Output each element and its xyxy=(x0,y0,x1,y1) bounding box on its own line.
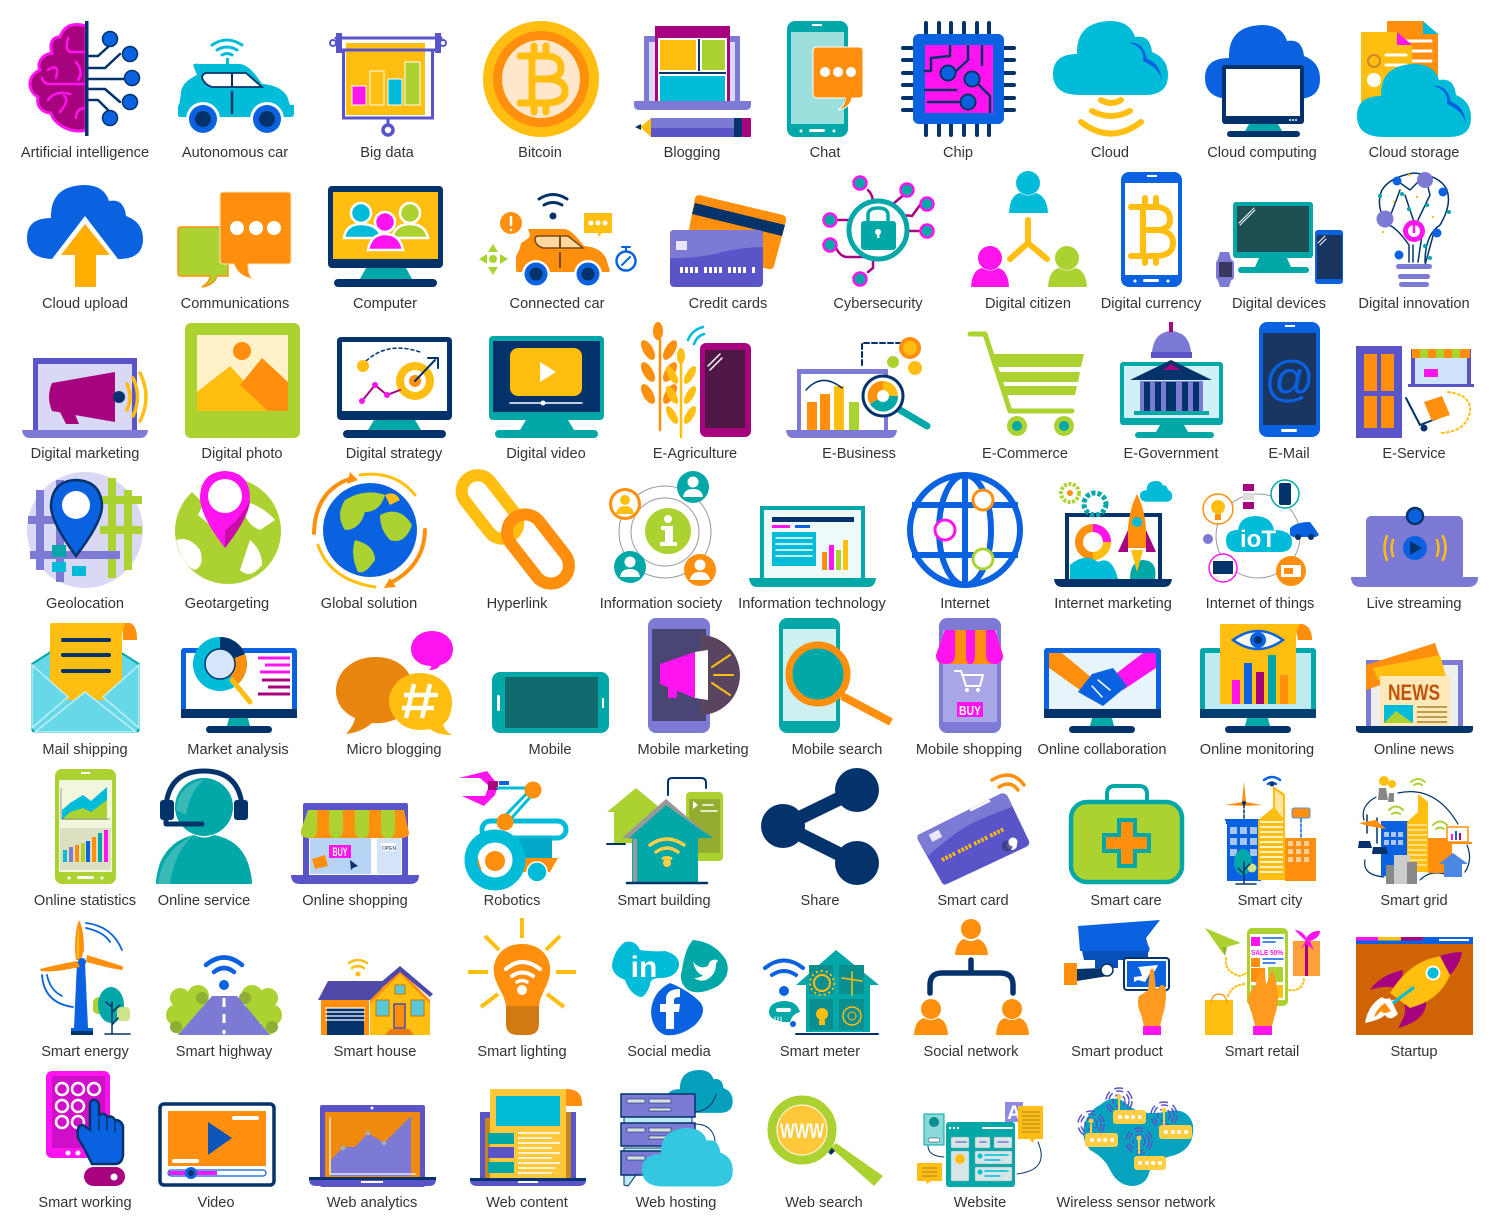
icon: hyperlink xyxy=(455,469,576,591)
icon: e-mail xyxy=(1259,322,1320,437)
icon: bitcoin xyxy=(483,21,599,137)
label: smart product: Smart product xyxy=(1071,1044,1163,1060)
label: chip: Chip xyxy=(943,145,973,161)
icon: share xyxy=(761,768,879,885)
icon: website: A xyxy=(1007,1103,1021,1124)
icon: cloud upload xyxy=(27,185,143,287)
label: smart building: Smart building xyxy=(617,893,711,909)
icon: online collaboration xyxy=(1044,648,1161,733)
icon: e-mail: @ xyxy=(1264,351,1315,407)
icon: digital photo xyxy=(185,323,300,438)
label: micro blogging: Micro blogging xyxy=(347,742,441,758)
icon: online shopping: BUY xyxy=(332,845,348,859)
icon: mail shipping xyxy=(32,623,139,732)
label: smart grid: Smart grid xyxy=(1380,893,1448,909)
label: internet: Internet xyxy=(940,596,990,612)
label: e-commerce: E-Commerce xyxy=(982,446,1068,462)
icon: digital video xyxy=(489,336,604,438)
icon: mobile search xyxy=(779,618,891,733)
label: digital video: Digital video xyxy=(506,446,586,462)
icon: cloud storage xyxy=(1357,21,1471,137)
label: online monitoring: Online monitoring xyxy=(1200,742,1314,758)
label: communications: Communications xyxy=(181,296,289,312)
label: live streaming: Live streaming xyxy=(1367,596,1461,612)
label: web hosting: Web hosting xyxy=(636,1195,716,1211)
icon: e-agriculture xyxy=(638,322,751,437)
icon: market analysis xyxy=(181,637,297,733)
icon: smart highway xyxy=(166,958,282,1035)
icon: autonomous car xyxy=(178,40,294,136)
icon: video xyxy=(160,1104,274,1185)
icon: e-business xyxy=(786,337,927,438)
icon: smart city xyxy=(1225,777,1316,884)
label: online news: Online news xyxy=(1374,742,1454,758)
icon: smart retail: SALE 50% xyxy=(1251,950,1284,957)
icon: social network xyxy=(914,919,1029,1035)
label: mobile search: Mobile search xyxy=(792,742,882,758)
label: smart house: Smart house xyxy=(334,1044,416,1060)
icon: startup xyxy=(1356,937,1473,1035)
label: web content: Web content xyxy=(486,1195,568,1211)
icon: chat xyxy=(787,21,863,137)
icon: live streaming xyxy=(1351,508,1478,587)
label: smart meter: Smart meter xyxy=(780,1044,860,1060)
icon: information technology xyxy=(749,506,876,587)
icon: smart product xyxy=(1064,920,1169,1035)
icon: digital currency xyxy=(1121,172,1182,287)
icon: mobile shopping xyxy=(936,618,1003,733)
label: online collaboration: Online collaboration xyxy=(1038,742,1166,758)
icon: digital strategy xyxy=(337,337,452,438)
label: autonomous car: Autonomous car xyxy=(182,145,288,161)
label: online service: Online service xyxy=(158,893,250,909)
icon: smart care xyxy=(1071,786,1182,882)
icon: connected car xyxy=(479,194,636,288)
label: artificial intelligence: Artificial intelligence xyxy=(21,145,149,161)
label: wireless sensor network: Wireless sensor network xyxy=(1057,1195,1216,1211)
icon: social media: in xyxy=(631,951,657,984)
icon: chip xyxy=(903,23,1014,135)
icon: mobile marketing xyxy=(648,618,740,733)
icon: digital marketing xyxy=(22,358,148,438)
icon: digital citizen xyxy=(971,171,1087,287)
label: mobile: Mobile xyxy=(528,742,572,758)
icon: robotics xyxy=(459,771,566,884)
icon: web search xyxy=(772,1100,883,1186)
icon: web hosting xyxy=(621,1070,733,1186)
label: e-government: E-Government xyxy=(1124,446,1218,462)
label: global solution: Global solution xyxy=(321,596,417,612)
label: mobile marketing: Mobile marketing xyxy=(637,742,749,758)
label: website: Website xyxy=(954,1195,1006,1211)
icon: mobile shopping: BUY xyxy=(959,703,981,718)
icon: web search: WWW xyxy=(780,1120,824,1143)
icon: internet of things xyxy=(1203,480,1319,586)
label: computer: Computer xyxy=(353,296,417,312)
icon: mobile xyxy=(492,672,609,733)
label: information society: Information society xyxy=(600,596,723,612)
icon: smart grid xyxy=(1358,776,1472,884)
icon: web content xyxy=(470,1089,586,1186)
label: share: Share xyxy=(801,893,839,909)
icon: computer xyxy=(328,186,443,287)
label: market analysis: Market analysis xyxy=(187,742,289,758)
label: cloud computing: Cloud computing xyxy=(1207,145,1317,161)
icon: online service xyxy=(156,771,252,884)
icon: cybersecurity xyxy=(824,176,934,286)
icon: smart house xyxy=(318,960,433,1035)
icon: online shopping xyxy=(291,803,419,884)
icon: internet of things: ioT xyxy=(1240,526,1276,553)
icon: online statistics xyxy=(55,769,116,884)
icon: smart working xyxy=(46,1071,125,1186)
icon: smart retail xyxy=(1205,928,1320,1035)
label: e-service: E-Service xyxy=(1382,446,1446,462)
label: online statistics: Online statistics xyxy=(34,893,136,909)
icon: geolocation xyxy=(27,472,143,588)
icon: geotargeting xyxy=(175,471,281,584)
icon: smart card xyxy=(918,775,1029,885)
label: hyperlink: Hyperlink xyxy=(487,596,548,612)
label: digital strategy: Digital strategy xyxy=(346,446,443,462)
label: cloud upload: Cloud upload xyxy=(42,296,128,312)
icon: web analytics xyxy=(309,1105,436,1187)
label: digital photo: Digital photo xyxy=(201,446,283,462)
label: digital currency: Digital currency xyxy=(1101,296,1202,312)
label: digital marketing: Digital marketing xyxy=(31,446,139,462)
label: mobile shopping: Mobile shopping xyxy=(916,742,1022,758)
label: cloud storage: Cloud storage xyxy=(1369,145,1459,161)
awning xyxy=(301,810,409,838)
label: smart retail: Smart retail xyxy=(1225,1044,1299,1060)
label: smart card: Smart card xyxy=(937,893,1009,909)
label: internet of things: Internet of things xyxy=(1206,596,1314,612)
label: geotargeting: Geotargeting xyxy=(185,596,269,612)
label: cybersecurity: Cybersecurity xyxy=(833,296,923,312)
label: social media: Social media xyxy=(627,1044,712,1060)
label: video: Video xyxy=(197,1195,235,1211)
icon: online shopping: OPEN xyxy=(382,846,396,852)
icon: digital devices xyxy=(1216,202,1343,287)
icon: e-service xyxy=(1356,346,1474,438)
label: smart energy: Smart energy xyxy=(41,1044,129,1060)
icon: e-commerce xyxy=(970,334,1084,436)
label: smart highway: Smart highway xyxy=(176,1044,273,1060)
label: connected car: Connected car xyxy=(510,296,605,312)
icon: online monitoring xyxy=(1200,624,1316,733)
label: blogging: Blogging xyxy=(664,145,720,161)
icon: cloud computing xyxy=(1205,25,1320,137)
icon: digital innovation xyxy=(1376,172,1451,287)
label: chat: Chat xyxy=(810,145,840,161)
label: digital devices: Digital devices xyxy=(1232,296,1326,312)
icon: artificial intelligence xyxy=(30,21,139,136)
icon: information society xyxy=(609,471,716,586)
icon: smart energy xyxy=(40,920,130,1035)
label: big data: Big data xyxy=(360,145,415,161)
label: cloud: Cloud xyxy=(1091,145,1129,161)
label: smart lighting: Smart lighting xyxy=(477,1044,567,1060)
label: information technology: Information technology xyxy=(738,596,887,612)
label: web analytics: Web analytics xyxy=(327,1195,417,1211)
icon: communications xyxy=(178,192,291,287)
label: web search: Web search xyxy=(785,1195,863,1211)
label: social network: Social network xyxy=(924,1044,1019,1060)
icon: online news xyxy=(1356,643,1473,733)
icon: social media xyxy=(612,940,728,1035)
icon: wireless sensor network xyxy=(1078,1088,1193,1186)
icon: smart meter xyxy=(765,950,879,1034)
label: online shopping: Online shopping xyxy=(302,893,408,909)
icon: smart lighting xyxy=(468,918,576,1035)
icon: blogging xyxy=(634,26,751,137)
label: credit cards: Credit cards xyxy=(689,296,767,312)
label: e-mail: E-Mail xyxy=(1268,446,1310,462)
label: internet marketing: Internet marketing xyxy=(1054,596,1172,612)
icon: e-government xyxy=(1120,322,1223,438)
label: digital innovation: Digital innovation xyxy=(1358,296,1470,312)
icon: global solution xyxy=(314,472,425,588)
icon: internet xyxy=(910,475,1020,585)
label: bitcoin: Bitcoin xyxy=(518,145,562,161)
label: smart city: Smart city xyxy=(1238,893,1303,909)
icon: big data xyxy=(330,33,446,135)
icon: online news: NEWS xyxy=(1388,680,1440,705)
icon: credit cards xyxy=(670,195,786,287)
label: e-business: E-Business xyxy=(822,446,896,462)
label: geolocation: Geolocation xyxy=(46,596,124,612)
label: mail shipping: Mail shipping xyxy=(42,742,128,758)
label: digital citizen: Digital citizen xyxy=(985,296,1071,312)
label: startup: Startup xyxy=(1390,1044,1438,1060)
label: smart care: Smart care xyxy=(1090,893,1162,909)
icon: cloud xyxy=(1053,21,1168,134)
label: robotics: Robotics xyxy=(484,893,540,909)
label: smart working: Smart working xyxy=(38,1195,132,1211)
icon: website xyxy=(917,1102,1043,1187)
icon: internet marketing xyxy=(1054,481,1172,587)
icon: smart building xyxy=(607,778,723,883)
icon: micro blogging xyxy=(336,631,453,735)
label: e-agriculture: E-Agriculture xyxy=(653,446,737,462)
